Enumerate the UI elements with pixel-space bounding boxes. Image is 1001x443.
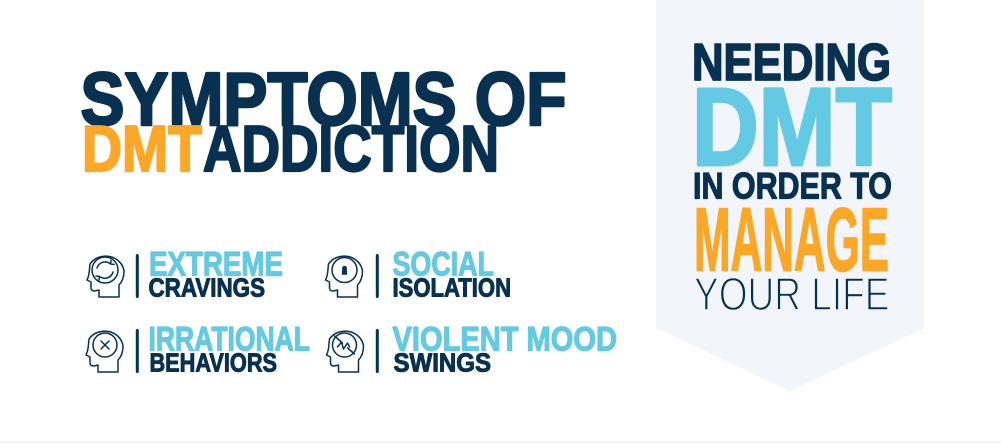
- divider bar: [376, 329, 379, 373]
- label: EXTREME: [149, 246, 283, 284]
- title: symptoms of DMT addiction: DMT: [82, 112, 202, 185]
- label: [392, 320, 617, 378]
- title: symptoms of DMT addiction: ADDICTION: [203, 112, 499, 185]
- divider bar: [136, 254, 139, 298]
- label: BEHAVIORS: [150, 348, 277, 378]
- banner shape: [656, 0, 924, 391]
- banner text: [692, 34, 892, 320]
- symptom: violent mood swings: [326, 320, 617, 378]
- title: symptoms of DMT addiction: [80, 57, 566, 185]
- symptom: irrational behaviors: [86, 320, 310, 378]
- label: IRRATIONAL: [148, 320, 310, 358]
- divider bar: [376, 254, 379, 298]
- label: ISOLATION: [392, 272, 511, 302]
- icon: head with circular arrows: [87, 256, 124, 297]
- label: [148, 320, 310, 378]
- label: VIOLENT MOOD: [392, 320, 617, 358]
- title: symptoms of DMT addiction: SYMPTOMS OF: [80, 57, 566, 141]
- icon: head with x: [86, 331, 123, 372]
- label: [148, 246, 283, 302]
- banner text: NEEDING: [692, 34, 891, 92]
- label: CRAVINGS: [148, 272, 265, 302]
- divider bar: [136, 329, 139, 373]
- label: SOCIAL: [392, 246, 494, 284]
- label: SWINGS: [394, 348, 491, 378]
- banner text: DMT: [692, 66, 892, 189]
- symptom: extreme cravings: [87, 246, 283, 302]
- icon: head with keyhole: [326, 256, 362, 297]
- symptom: social isolation: [326, 246, 511, 302]
- panel: needing DMT banner: [656, 0, 924, 391]
- label: [392, 246, 511, 302]
- icon: head with broken clock: [326, 331, 364, 372]
- banner text: YOUR LIFE: [694, 268, 890, 320]
- banner text: IN ORDER TO: [693, 166, 892, 206]
